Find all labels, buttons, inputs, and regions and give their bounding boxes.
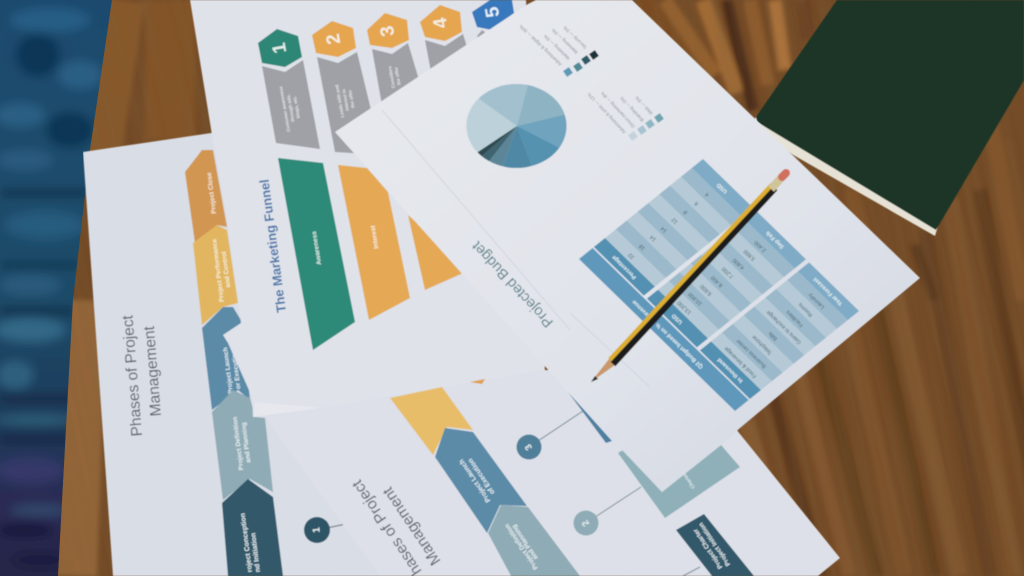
budget table [579,159,859,411]
step 2: grey description: interest in [341,89,350,111]
table values: 18 [638,243,647,251]
table values: 22 [627,251,636,260]
step: project launch or execution: of Execution [467,457,497,495]
step: project performance and control: Project Performance [211,238,226,302]
table values: 13,200 [677,299,693,315]
legend: light swatches [587,91,664,141]
step 1: teal hexagon: 1 [269,41,291,55]
step: project close [185,150,227,243]
paper: the marketing funnel [190,0,545,417]
pencil eraser [782,173,786,177]
callout box: project initiation: Project Initiation [698,521,732,567]
table values: Laundry [807,292,826,310]
step: project conception and initiation [222,479,283,576]
table headers: Year Forecast [813,276,844,307]
step: project definition and planning: and Planning [511,523,540,561]
legend: light swatches: Direct marketing — 8% [600,91,636,129]
legend: dark swatches [518,24,599,77]
step: project conception and initiation: nd Initiation [250,532,262,573]
step 4: orange hexagon: 4 [430,16,452,30]
step: project definition and planning [212,390,273,500]
paper: phases of project management [83,132,400,576]
notebook pages edge [752,116,938,236]
table values: 3,600 [743,248,757,262]
marker: number 2 [574,487,641,536]
blue carpet background [0,0,150,576]
step: project launch or execution: Project Launch [222,347,235,394]
table values: Food & beverage [724,345,758,379]
paper: projected budget [335,0,920,492]
funnel stage: consideration [408,215,470,290]
step: yellow segment [390,387,473,455]
table values: 10,800 [687,291,704,307]
step: project definition and planning: Project Definition [232,416,245,471]
table headers [611,181,844,384]
callout box: project initiation [676,514,754,576]
table headers: USD [716,181,729,194]
step: project launch or execution [435,428,527,533]
step 5: grey description [477,30,510,60]
legend: light swatches: Branding — 5% [619,96,645,123]
funnel stage: awareness: Awareness [311,230,323,265]
step 5: blue hexagon [472,0,514,30]
table values: 2,400 [754,239,768,253]
table values: Facilities [785,309,805,328]
pie chart [466,84,567,168]
fold crease [253,402,322,417]
step 3: orange hexagon [367,13,409,48]
legend: dark swatches: Advertising & digital — 30% [518,24,563,67]
step: project definition and planning: Project Definition [504,522,540,571]
step: project conception and initiation: roject Conception [240,513,254,573]
funnel stage: interest: Interest [370,224,380,249]
table headers: Q2 Budget based on % of Revenue [631,298,705,370]
step 2: grey description [317,52,382,155]
step: project launch or execution: or Execution [231,350,242,390]
table headers: USD [671,312,684,325]
callout box: step 2: Charter [682,471,697,490]
table headers: In thousand [716,356,744,384]
table values: 7,200 [721,265,735,279]
marker: number 1 [304,517,346,543]
step 1: grey description: through ads, [286,94,295,122]
heading: upside-down title: Management [379,483,444,568]
step 1: teal hexagon [258,29,302,67]
step 3: grey description: the offer [393,66,402,86]
step: project definition and planning: and Planning [241,422,252,463]
step 3: grey description: Considers [387,65,396,89]
callout box: project initiation: Project Charter [692,527,724,570]
paper: phases of project management, upside down [265,370,840,576]
step: orange sliver [470,379,485,384]
step: project performance and control: and Control [221,251,232,288]
step 2: grey description: the offer [347,89,355,109]
step 4: orange hexagon [420,5,462,41]
marker: number 3: 3 [523,442,535,452]
notebook [752,0,1024,236]
legend: dark swatches: Marketing — 5% [551,28,579,55]
notebook cover [756,0,1024,230]
legend: light swatches: Web — 5% [634,95,654,116]
funnel stage: awareness [278,158,355,350]
marker: number 3 [516,411,583,460]
table values: Rooms [797,301,814,318]
inner sheet crease [382,110,650,387]
table headers: Sep Feb [765,229,786,249]
step: project launch or execution: Project Launch [458,458,492,503]
step 3: orange hexagon: 3 [377,24,399,38]
funnel stage: interest [338,165,410,320]
step 4: grey description [425,34,490,120]
table values: 8,400 [710,274,724,288]
step 1: grey description: blogs, etc. [292,95,301,119]
table values: Business center [735,337,768,369]
heading: projected budget: Projected Budget [469,238,557,330]
heading: phases of project management: Management [141,325,165,417]
table headers: Percentage [611,253,638,280]
callout box: step 2 [618,445,740,518]
table values: 14 [649,234,658,242]
table values: Gains to exchange [766,309,803,345]
table values: 4,800 [732,257,746,271]
step: project definition and planning [488,505,580,576]
step: project close: Project Close [206,172,218,214]
step 2: orange hexagon: 2 [323,32,345,46]
step 3: grey description [372,43,440,150]
marker: number 1: 1 [311,526,323,533]
table values: 12 [671,216,679,225]
legend: light swatches: Advertising & print — 12% [587,92,627,135]
pencil ferrule [771,177,782,189]
step: project launch or execution [202,307,250,410]
step 2: grey description: Leads with and [334,84,345,118]
table values: Bills [767,330,779,341]
marker line: number 1 [683,567,700,576]
heading: phases of project management: Phases of Project [119,314,146,437]
fine grain texture [722,4,920,512]
marker: number 2: 2 [580,518,592,528]
sliver of blue callout [568,392,612,443]
pencil tip [591,359,615,382]
legend: dark swatches: Security — 5% [562,25,588,50]
table values: 6 [694,200,700,206]
table values [627,191,826,379]
table values: 9,600 [699,283,713,297]
table values: 8 [683,209,689,215]
step 1: grey description [262,60,320,149]
step 5: blue hexagon: 5 [482,5,504,19]
table values: 14 [660,225,668,234]
table values: Telephone [751,334,774,355]
table values: 4 [704,191,711,198]
table cells [579,159,859,411]
pencil body [613,188,775,364]
heading: upside-down title: hases of Project [349,476,425,576]
pencil [591,173,786,382]
step: project performance and control [193,225,238,325]
legend: dark swatches: Marketing — 5% [543,34,571,61]
heading: phases of project management [119,314,165,437]
heading: the marketing funnel: The Marketing Funnel [257,178,289,314]
step 2: orange hexagon [312,21,356,57]
step 1: grey description: Customer awareness [278,86,291,132]
